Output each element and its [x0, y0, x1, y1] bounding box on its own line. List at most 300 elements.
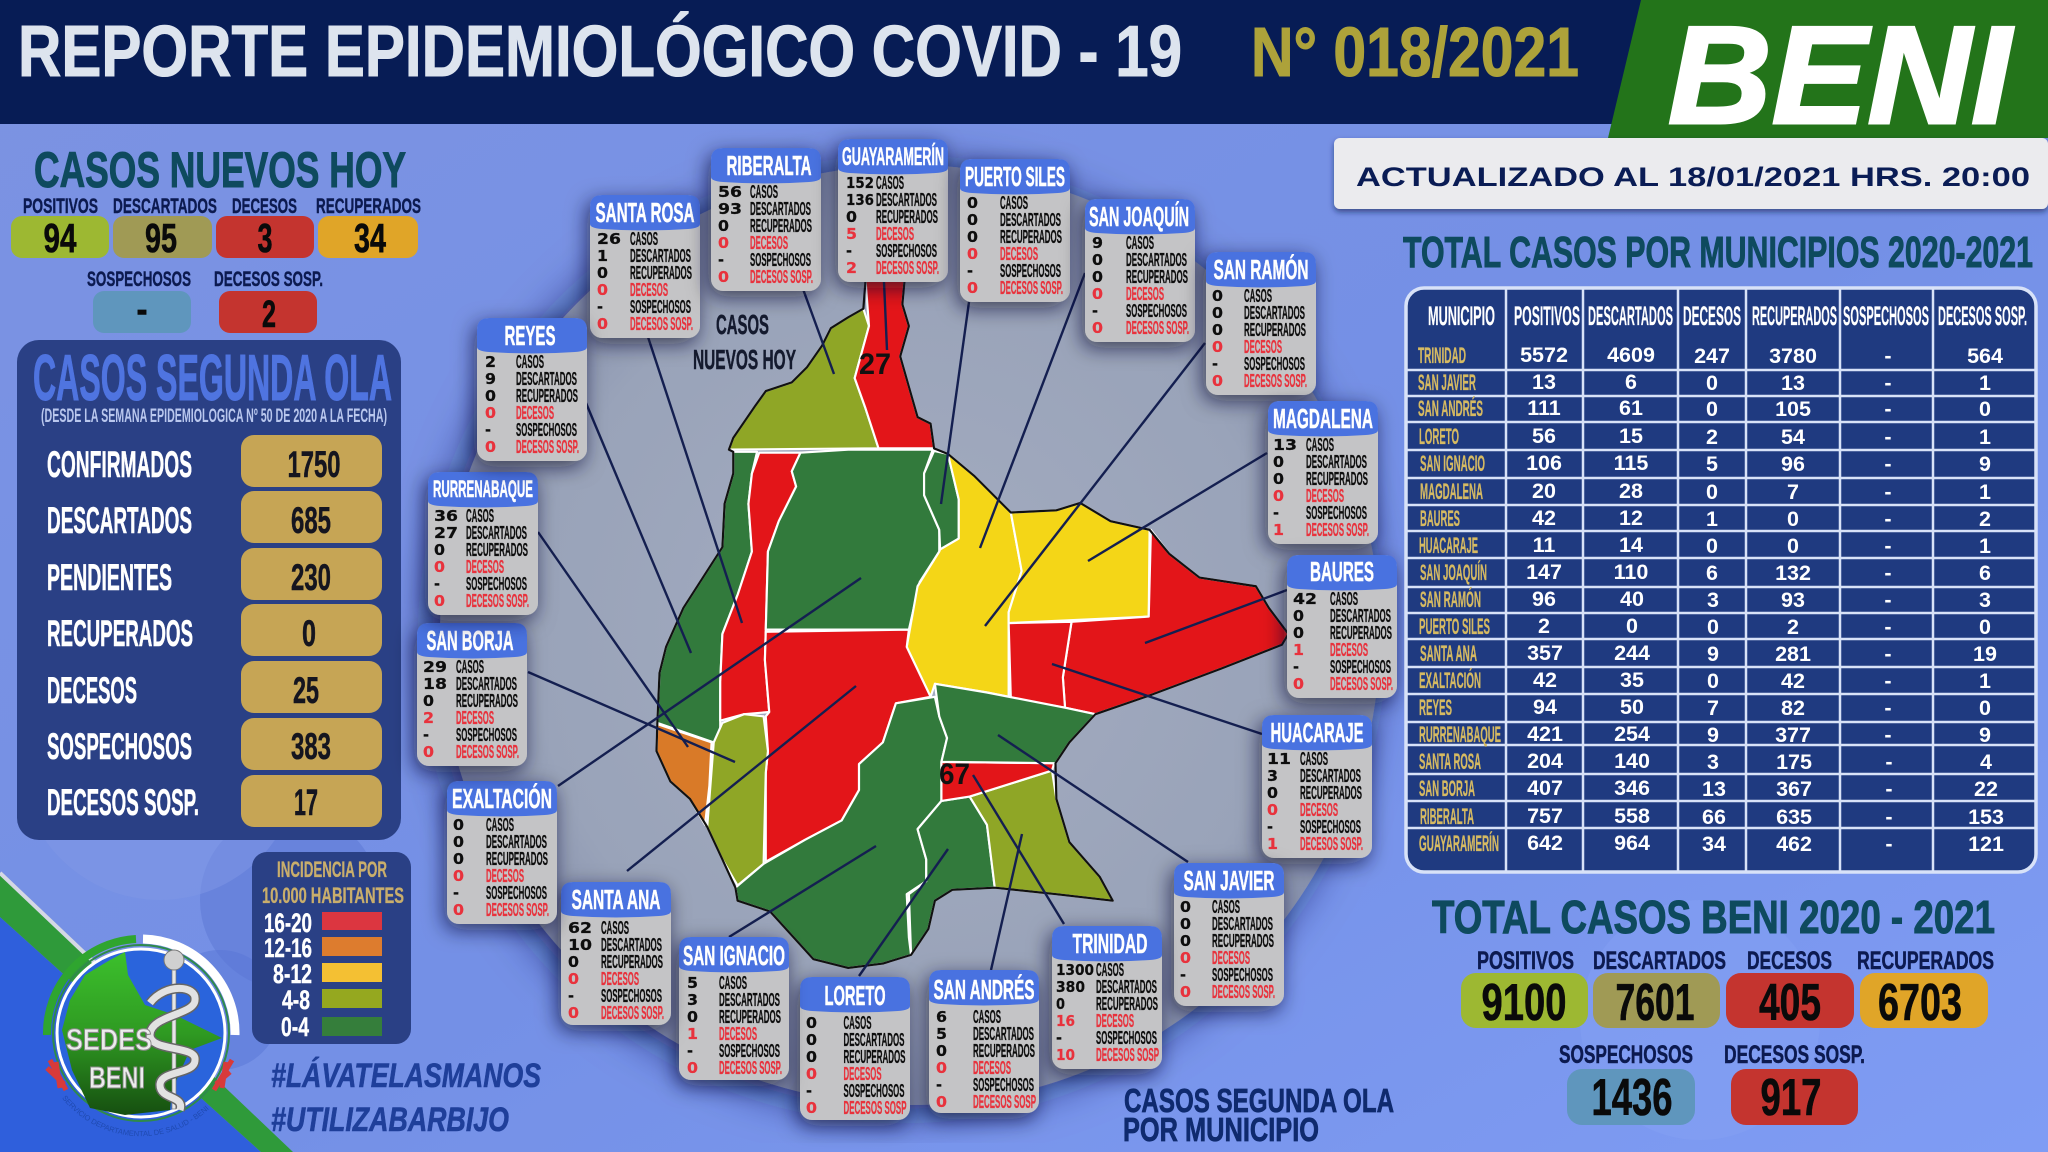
card: Magdalena: 0	[1273, 487, 1284, 505]
table: total cases by municipality: -	[1884, 615, 1892, 639]
table: total cases by municipality: GUAYARAMERÍN	[1419, 831, 1499, 856]
card: San Andrés: 6	[936, 1008, 947, 1026]
card: Loreto: -	[806, 1082, 812, 1100]
card: Loreto	[800, 977, 910, 1120]
table: total cases by municipality: 96	[1781, 452, 1805, 476]
card: Rurrenabaque: -	[434, 575, 440, 593]
table: total cases by municipality: 3780	[1769, 344, 1817, 368]
table: total cases by municipality: 6	[1625, 370, 1637, 394]
panel: casos nuevos hoy: DECESOS SOSP.	[214, 268, 323, 291]
card: Loreto: CASOS	[844, 1013, 872, 1033]
card: Santa Ana: SANTA ANA	[572, 884, 660, 915]
table: total cases by municipality: 13	[1781, 371, 1805, 395]
card: San Ramón: 0	[1212, 338, 1223, 356]
table: total cases by municipality: 367	[1776, 777, 1812, 801]
text: DESCARTADOS	[973, 1024, 1034, 1044]
card: Reyes: 0	[485, 438, 496, 456]
map caption: casos nuevos hoy: NUEVOS HOY	[693, 344, 796, 375]
table: total cases by municipality: 42	[1533, 668, 1557, 692]
table: total cases by municipality: SAN RAMÓN	[1420, 587, 1481, 612]
text: DECESOS SOSP.	[516, 437, 579, 457]
legend: incidencia por 10.000 habitantes: 12-16	[264, 933, 312, 963]
card: Loreto: DECESOS	[844, 1064, 882, 1084]
table: total cases by municipality: 111	[1527, 396, 1561, 420]
card: Santa Ana: 62	[568, 919, 592, 937]
card: Puerto Siles: 0	[967, 228, 978, 246]
card: Guayaramerín: RECUPERADOS	[876, 207, 938, 227]
table: total cases by municipality: 93	[1781, 588, 1805, 612]
table: total cases by municipality: SAN ANDRÉS	[1418, 396, 1483, 421]
card: Magdalena: SOSPECHOSOS	[1306, 503, 1367, 523]
text: DECESOS SOSP.	[1126, 318, 1189, 338]
table: total cases by municipality: 9	[1979, 723, 1991, 747]
table: total cases by municipality: 54	[1781, 425, 1805, 449]
card: San Andrés: 0	[936, 1059, 947, 1077]
card: San Javier: CASOS	[1212, 897, 1240, 917]
card: Trinidad: 16	[1056, 1012, 1075, 1030]
table: total cases by municipality: BAURES	[1420, 506, 1460, 531]
table: total cases by municipality: SAN BORJA	[1419, 776, 1475, 801]
card: San Ignacio: 0	[687, 1059, 698, 1077]
card: Magdalena: 1	[1273, 521, 1284, 539]
card: San Andrés: DECESOS	[973, 1058, 1011, 1078]
panel: total casos beni: 7601	[1616, 974, 1694, 1032]
table: total cases by municipality: 642	[1527, 831, 1563, 855]
card: Exaltación	[447, 781, 557, 924]
map of Beni municipalities	[656, 280, 1288, 968]
card: San Ramón: 0	[1212, 304, 1223, 322]
panel: casos segunda ola: DESCARTADOS	[47, 500, 192, 541]
card: Exaltación: -	[453, 884, 459, 902]
table header row: SOSPECHOSOS	[1843, 301, 1929, 331]
caption: casos segunda ola por municipio: CASOS SEGUNDA OLA	[1124, 1082, 1394, 1119]
card: Puerto Siles	[960, 159, 1070, 302]
table: total cases by municipality: 12	[1619, 506, 1643, 530]
panel: casos nuevos hoy: -	[136, 289, 148, 331]
table: total cases by municipality: 462	[1776, 832, 1812, 856]
card: San Javier	[1174, 863, 1284, 1006]
card: Rurrenabaque: SOSPECHOSOS	[466, 574, 527, 594]
card: San Ramón: DECESOS	[1244, 337, 1282, 357]
card: Reyes: REYES	[504, 320, 556, 351]
table header row	[1428, 301, 2027, 331]
panel: casos nuevos hoy: SOSPECHOSOS	[87, 268, 191, 291]
table: total cases by municipality: 20	[1532, 479, 1556, 503]
panel: total casos beni: SOSPECHOSOS	[1559, 1041, 1693, 1069]
table: total cases by municipality: 153	[1968, 805, 2004, 829]
table: total cases by municipality: -	[1884, 669, 1892, 693]
card: Trinidad: CASOS	[1096, 960, 1124, 980]
card: Puerto Siles: 0	[967, 279, 978, 297]
table: total cases by municipality: 132	[1775, 561, 1811, 585]
card: Santa Rosa: 0	[597, 264, 608, 282]
card: Guayaramerín: 152	[846, 174, 874, 192]
table: total cases by municipality: 50	[1620, 695, 1644, 719]
card: Santa Rosa: SANTA ROSA	[596, 197, 694, 228]
card: Magdalena: 13	[1273, 436, 1297, 454]
card: San Borja: 0	[423, 692, 434, 710]
card: Reyes: SOSPECHOSOS	[516, 420, 577, 440]
table: total cases by municipality: 204	[1527, 749, 1563, 773]
card: San Borja: RECUPERADOS	[456, 691, 518, 711]
table: total cases by municipality: SAN IGNACIO	[1420, 451, 1485, 476]
card: Exaltación: 0	[453, 867, 464, 885]
table: total cases by municipality: 15	[1619, 424, 1643, 448]
text: RECUPERADOS	[1096, 994, 1158, 1014]
card: San Ramón: 0	[1212, 372, 1223, 390]
table: total cases by municipality: 0	[1979, 615, 1991, 639]
table: total cases by municipality: 1	[1979, 371, 1991, 395]
card: San Javier: RECUPERADOS	[1212, 931, 1274, 951]
panel: casos nuevos hoy: DESCARTADOS	[113, 195, 217, 218]
card: Riberalta: 56	[718, 183, 742, 201]
text: DECESOS SOSP.	[876, 258, 939, 278]
card: Baures: 42	[1293, 590, 1317, 608]
table: total cases by municipality: 254	[1614, 722, 1650, 746]
card: Exaltación: 0	[453, 833, 464, 851]
card: Huacaraje: 11	[1267, 750, 1291, 768]
table: total cases by municipality: 96	[1532, 587, 1556, 611]
table: total cases by municipality: 56	[1532, 424, 1556, 448]
card: Baures	[1287, 555, 1397, 698]
card: Puerto Siles: PUERTO SILES	[965, 161, 1065, 192]
card: Rurrenabaque: DESCARTADOS	[466, 523, 527, 543]
table: total cases by municipality	[1406, 288, 2036, 872]
card: Santa Ana: 10	[568, 936, 592, 954]
department name: BENI	[1668, 0, 2013, 153]
caption: casos segunda ola por municipio: POR MUNICIPIO	[1123, 1111, 1319, 1148]
card: San Borja: DESCARTADOS	[456, 674, 517, 694]
text: DECESOS SOSP.	[466, 591, 529, 611]
hashtags	[271, 1057, 541, 1139]
card: Trinidad: DECESOS	[1096, 1011, 1134, 1031]
card: Guayaramerín: DESCARTADOS	[876, 190, 937, 210]
card: Baures: -	[1293, 658, 1299, 676]
card: Reyes: 0	[485, 404, 496, 422]
legend: incidencia por 10.000 habitantes: 10.000 HABITANTES	[262, 883, 404, 908]
card: Trinidad: TRINIDAD	[1072, 928, 1148, 959]
table: total cases by municipality: 7	[1787, 480, 1799, 504]
table header row: DECESOS	[1683, 301, 1741, 331]
table: total cases by municipality: 357	[1527, 641, 1563, 665]
card: San Borja: 18	[423, 675, 447, 693]
card: Loreto: 0	[806, 1048, 817, 1066]
card: San Borja: SAN BORJA	[426, 625, 514, 656]
text: DECESOS SOSP.	[1300, 834, 1363, 854]
card: Exaltación: DESCARTADOS	[486, 832, 547, 852]
panel: casos segunda ola: DECESOS SOSP.	[47, 782, 199, 823]
panel: casos segunda ola	[17, 340, 401, 840]
text: RECUPERADOS	[601, 952, 663, 972]
card: San Joaquín: 9	[1092, 234, 1103, 252]
card: San Andrés	[929, 970, 1039, 1113]
table: total cases by municipality: 0	[1706, 397, 1718, 421]
panel: casos nuevos hoy: 34	[354, 215, 386, 261]
card: Puerto Siles: DESCARTADOS	[1000, 210, 1061, 230]
card: Puerto Siles: 0	[967, 194, 978, 212]
card: Guayaramerín: -	[846, 242, 852, 260]
table: total cases by municipality: -	[1884, 723, 1892, 747]
panel: total casos beni: 917	[1760, 1069, 1822, 1127]
card: Exaltación: DECESOS	[486, 866, 524, 886]
table header row: DESCARTADOS	[1588, 301, 1673, 331]
icon: SEDES Beni logo	[42, 934, 240, 1136]
card: Santa Rosa: 0	[597, 281, 608, 299]
card: Santa Rosa	[590, 195, 700, 338]
card: Magdalena: MAGDALENA	[1273, 403, 1373, 434]
card: San Javier: 0	[1180, 932, 1191, 950]
grey circle behind the map	[440, 165, 1380, 1105]
card: Guayaramerín: DECESOS	[876, 224, 914, 244]
card: Riberalta: DESCARTADOS	[750, 199, 811, 219]
panel: total casos beni	[1432, 891, 1995, 1127]
card: Trinidad	[1052, 926, 1162, 1069]
card: Riberalta: 0	[718, 234, 729, 252]
card: San Javier: 0	[1180, 983, 1191, 1001]
text: DESCARTADOS	[1096, 977, 1157, 997]
table: total cases by municipality: 11	[1533, 533, 1555, 557]
table: total cases by municipality: 115	[1614, 451, 1648, 475]
card: Riberalta: 0	[718, 217, 729, 235]
table: total cases by municipality: 94	[1533, 695, 1557, 719]
card: San Ignacio: DESCARTADOS	[719, 990, 780, 1010]
card: San Joaquín: 0	[1092, 285, 1103, 303]
card: Magdalena: RECUPERADOS	[1306, 469, 1368, 489]
card: Huacaraje: HUACARAJE	[1270, 717, 1364, 748]
card: Santa Rosa: DECESOS	[630, 280, 668, 300]
table: total cases by municipality: -	[1884, 425, 1892, 449]
table: total cases by municipality: 2	[1706, 425, 1718, 449]
panel: casos nuevos hoy: 3	[258, 215, 272, 261]
text: RECUPERADOS	[973, 1041, 1035, 1061]
table: total cases by municipality: 281	[1775, 642, 1811, 666]
text: DECESOS SOSP.	[1244, 371, 1307, 391]
card: Magdalena: DESCARTADOS	[1306, 452, 1367, 472]
card: San Ignacio: 3	[687, 991, 698, 1009]
card: Santa Ana: 0	[568, 970, 579, 988]
table: total cases by municipality: 0	[1626, 614, 1638, 638]
table: total cases by municipality: 2	[1538, 614, 1550, 638]
table: total cases by municipality: 13	[1532, 370, 1556, 394]
card: Magdalena: CASOS	[1306, 435, 1334, 455]
table: total cases by municipality: 0	[1706, 480, 1718, 504]
panel: casos segunda ola: 230	[291, 557, 331, 598]
card: Riberalta: 93	[718, 200, 742, 218]
header band	[0, 0, 2048, 153]
card: San Ignacio: 0	[687, 1008, 698, 1026]
text: SOSPECHOSOS	[1126, 301, 1187, 321]
table: total cases by municipality: 9	[1979, 452, 1991, 476]
panel: casos segunda ola: RECUPERADOS	[47, 613, 193, 654]
card: San Ignacio: DECESOS	[719, 1024, 757, 1044]
card: Exaltación: 0	[453, 850, 464, 868]
card: San Joaquín: 0	[1092, 251, 1103, 269]
text: SOSPECHOSOS	[719, 1041, 780, 1061]
card: Santa Rosa: 26	[597, 230, 621, 248]
card: Guayaramerín: CASOS	[876, 173, 904, 193]
card: Huacaraje: DECESOS	[1300, 800, 1338, 820]
table: total cases by municipality: 82	[1781, 696, 1805, 720]
table: total cases by municipality: 1	[1979, 425, 1991, 449]
card: San Borja: 29	[423, 658, 447, 676]
card: Reyes: DESCARTADOS	[516, 369, 577, 389]
text: DECESOS SOSP	[973, 1092, 1036, 1112]
table: total cases by municipality: -	[1884, 642, 1892, 666]
table header row: RECUPERADOS	[1752, 301, 1837, 331]
card: Baures: 0	[1293, 624, 1304, 642]
card: Loreto: 0	[806, 1099, 817, 1117]
card: San Andrés: -	[936, 1076, 942, 1094]
card: San Ignacio: CASOS	[719, 973, 747, 993]
table: total cases by municipality: 0	[1787, 534, 1799, 558]
card: San Joaquín: 0	[1092, 268, 1103, 286]
panel: total casos beni: DECESOS SOSP.	[1724, 1041, 1865, 1069]
card: Rurrenabaque: CASOS	[466, 506, 494, 526]
table: total cases by municipality: -	[1884, 588, 1892, 612]
card: Huacaraje: 1	[1267, 835, 1278, 853]
card: San Borja: 2	[423, 709, 434, 727]
table: total cases by municipality: 0	[1787, 507, 1799, 531]
card: San Borja	[417, 623, 527, 766]
table: total cases by municipality: 6	[1706, 561, 1718, 585]
legend: incidencia por 10.000 habitantes: 16-20	[264, 908, 312, 938]
table: total cases by municipality: PUERTO SILES	[1419, 614, 1490, 639]
card: Exaltación: 0	[453, 901, 464, 919]
panel: casos nuevos hoy	[11, 142, 421, 336]
panel: casos segunda ola: 685	[291, 500, 331, 541]
text: DECESOS SOSP	[844, 1098, 906, 1118]
card: San Joaquín: CASOS	[1126, 233, 1154, 253]
table: total cases by municipality: SANTA ANA	[1420, 641, 1477, 666]
table: total cases by municipality: 35	[1620, 668, 1644, 692]
panel: total casos beni: DESCARTADOS	[1593, 947, 1726, 975]
panel: casos segunda ola: SOSPECHOSOS	[47, 726, 192, 767]
card: Loreto: 0	[806, 1031, 817, 1049]
text: DESCARTADOS	[1330, 606, 1391, 626]
card: Reyes: 9	[485, 370, 496, 388]
card: Guayaramerín: 0	[846, 208, 857, 226]
caption: casos segunda ola por municipio	[1123, 1082, 1394, 1148]
card: Magdalena: DECESOS	[1306, 486, 1344, 506]
card: Santa Ana: -	[568, 987, 574, 1005]
table: total cases by municipality: -	[1885, 750, 1893, 774]
card: Trinidad: 0	[1056, 995, 1065, 1013]
table: total cases by municipality: 3	[1707, 750, 1719, 774]
card: San Andrés: CASOS	[973, 1007, 1001, 1027]
table: total cases by municipality: 4609	[1607, 343, 1655, 367]
card: Guayaramerín: 5	[846, 225, 857, 243]
card: Santa Ana: 0	[568, 953, 579, 971]
table: total cases by municipality: 175	[1776, 750, 1812, 774]
card: San Ramón: SOSPECHOSOS	[1244, 354, 1305, 374]
report number: N° 018/2021	[1251, 13, 1579, 91]
card: Reyes: 0	[485, 387, 496, 405]
card: San Ignacio	[679, 937, 789, 1080]
card: Magdalena: 0	[1273, 453, 1284, 471]
text: DECESOS SOSP.	[1306, 520, 1369, 540]
card: San Borja: 0	[423, 743, 434, 761]
card: Loreto: 0	[806, 1065, 817, 1083]
table: total cases by municipality: 964	[1614, 831, 1650, 855]
text: DECESOS SOSP.	[601, 1003, 664, 1023]
table: total cases by municipality: 110	[1614, 560, 1648, 584]
card: Puerto Siles: DECESOS	[1000, 244, 1038, 264]
hashtags: #UTILIZABARBIJO	[271, 1101, 509, 1139]
table: total cases by municipality: 346	[1614, 776, 1650, 800]
table: total cases by municipality: 42	[1781, 669, 1805, 693]
table: total cases by municipality: SAN JOAQUÍN	[1420, 560, 1487, 585]
text: SOSPECHOSOS	[844, 1081, 904, 1101]
table: total cases by municipality: 106	[1526, 451, 1562, 475]
card: Riberalta	[711, 148, 821, 291]
card: San Andrés: SAN ANDRÉS	[934, 974, 1034, 1005]
table: total cases by municipality: 0	[1707, 615, 1719, 639]
card: Baures: 0	[1293, 675, 1304, 693]
text: SOSPECHOSOS	[1000, 261, 1061, 281]
text: SOSPECHOSOS	[630, 297, 691, 317]
heading: casos nuevos hoy: CASOS NUEVOS HOY	[34, 142, 406, 198]
card: San Javier: 0	[1180, 949, 1191, 967]
card: San Joaquín: DESCARTADOS	[1126, 250, 1187, 270]
card: Huacaraje	[1262, 715, 1372, 858]
text: DECESOS SOSP.	[630, 314, 693, 334]
card: Puerto Siles: 0	[967, 211, 978, 229]
card: Huacaraje: RECUPERADOS	[1300, 783, 1362, 803]
table: total cases by municipality: -	[1884, 534, 1892, 558]
table: total cases by municipality: -	[1885, 777, 1893, 801]
panel: total casos beni: DECESOS	[1747, 947, 1832, 975]
card: Rurrenabaque: 36	[434, 507, 458, 525]
card: San Ramón: RECUPERADOS	[1244, 320, 1306, 340]
icon: SEDES Beni logo: SERVICIO DEPARTAMENTAL DE SALUD - BENI	[62, 1096, 208, 1136]
card: Santa Rosa: CASOS	[630, 229, 658, 249]
table: total cases by municipality: 247	[1694, 344, 1730, 368]
panel: casos segunda ola: CONFIRMADOS	[47, 444, 192, 485]
text: DECESOS SOSP.	[486, 900, 549, 920]
card: Riberalta: -	[718, 251, 724, 269]
table: total cases by municipality: EXALTACIÓN	[1419, 668, 1481, 693]
table: total cases by municipality: -	[1884, 371, 1892, 395]
table: total cases by municipality: 13	[1702, 777, 1726, 801]
card: Puerto Siles: -	[967, 262, 973, 280]
card: Exaltación: EXALTACIÓN	[452, 783, 552, 814]
card: San Javier: DECESOS	[1212, 948, 1250, 968]
text: RECUPERADOS	[1000, 227, 1062, 247]
card: San Borja: CASOS	[456, 657, 484, 677]
card: San Javier: 0	[1180, 915, 1191, 933]
table: total cases by municipality: -	[1884, 452, 1892, 476]
card: San Joaquín	[1085, 199, 1195, 342]
panel: casos segunda ola: (DESDE LA SEMANA EPIDEMIOLOGICA Nº 50 DE 2020 A LA FECHA)	[41, 406, 387, 427]
card: San Javier: -	[1180, 966, 1186, 984]
card: San Javier: SAN JAVIER	[1184, 865, 1274, 896]
card: San Ramón: 0	[1212, 287, 1223, 305]
card: Reyes	[477, 318, 587, 461]
panel: total casos beni: 405	[1759, 974, 1821, 1032]
table: total cases by municipality: LORETO	[1419, 424, 1459, 449]
text: SOSPECHOSOS	[1330, 657, 1391, 677]
card: Huacaraje: -	[1267, 818, 1273, 836]
card: Riberalta: RECUPERADOS	[750, 216, 812, 236]
table: total cases by municipality: RURRENABAQUE	[1419, 722, 1501, 747]
card: Santa Rosa: -	[597, 298, 603, 316]
card: Rurrenabaque	[428, 472, 538, 615]
legend: incidencia por 10.000 habitantes: 4-8	[282, 985, 310, 1015]
panel: casos segunda ola: CASOS SEGUNDA OLA	[33, 341, 392, 414]
card: Exaltación: 0	[453, 816, 464, 834]
card: Trinidad: 10	[1056, 1046, 1075, 1064]
text: DECESOS SOSP.	[750, 267, 813, 287]
